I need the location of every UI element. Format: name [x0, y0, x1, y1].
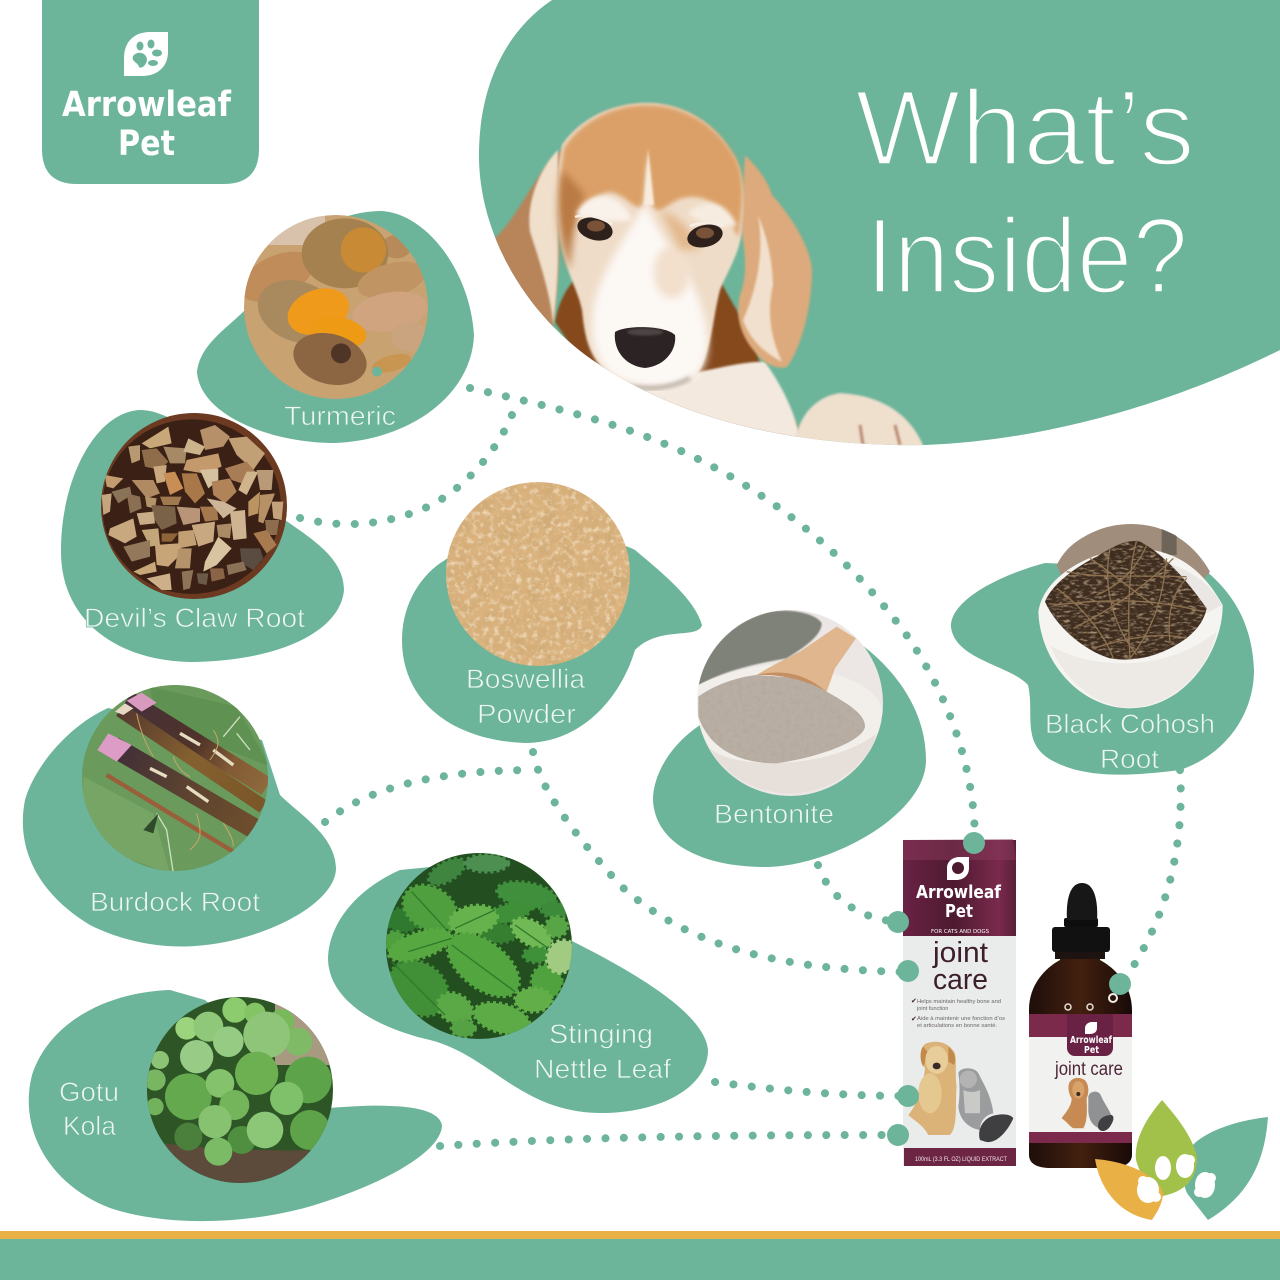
label: Turmeric — [284, 401, 396, 431]
photo: stinging nettle leaves — [386, 853, 572, 1039]
bottle brand text: Arrowleaf — [1070, 1035, 1112, 1046]
bottle brand text — [1070, 1035, 1112, 1056]
connector end dots — [887, 832, 1131, 1146]
label — [466, 664, 586, 729]
box claims: ✔ — [911, 1016, 917, 1023]
box claims: et articulations en bonne santé. — [917, 1023, 997, 1029]
icon: leaf with paw — [124, 32, 168, 76]
nose — [615, 327, 675, 368]
logo wordmark — [62, 85, 232, 164]
logo wordmark: Pet — [118, 124, 175, 164]
decorative three-leaf paw logo — [1095, 1100, 1268, 1220]
box pet photo: dog and cat — [908, 1042, 1013, 1142]
label: Powder — [477, 699, 576, 729]
box brand text: Arrowleaf — [916, 882, 1001, 903]
photo: boswellia powder — [445, 480, 631, 666]
box volume text: 100mL (3.3 FL OZ) LIQUID EXTRACT — [915, 1157, 1007, 1163]
box brand text — [916, 882, 1001, 935]
panel: Burdock Root — [23, 680, 336, 947]
label: Stinging — [549, 1019, 653, 1049]
label — [534, 1019, 672, 1084]
panel: Black Cohosh Root — [951, 523, 1254, 775]
label: Black Cohosh — [1045, 709, 1215, 739]
box brand text: Pet — [945, 901, 973, 922]
photo: black cohosh root in white bowl — [1038, 523, 1223, 708]
box claims — [911, 998, 1005, 1029]
box product name: joint — [932, 937, 988, 969]
logo wordmark: Arrowleaf — [62, 85, 232, 125]
title: What's Inside?: What’s — [855, 67, 1195, 188]
photo: devil's claw pieces in bowl — [100, 412, 290, 602]
product bottle: joint care dropper — [1029, 883, 1132, 1168]
logo badge: Arrowleaf Pet — [42, 0, 259, 184]
box claims: ✔ — [911, 998, 917, 1005]
label: Root — [1100, 744, 1160, 774]
dotted connector lines — [300, 388, 1181, 1146]
title: What's Inside?: Inside? — [866, 195, 1188, 316]
box brand text: FOR CATS AND DOGS — [931, 929, 989, 935]
panel: Stinging Nettle Leaf — [328, 845, 708, 1113]
panel: Devil's Claw Root — [61, 410, 344, 662]
beagle dog photo — [492, 103, 923, 450]
photo: bentonite clay in bowl — [697, 610, 883, 796]
box claims: joint function — [916, 1006, 948, 1012]
icon: box leaf logo — [947, 857, 969, 880]
bottle pet photo — [1062, 1078, 1113, 1131]
photo: gotu kola leaves — [147, 997, 333, 1183]
footer bands — [0, 1231, 1280, 1280]
label — [1045, 709, 1215, 774]
bottle product name: joint care — [1054, 1059, 1123, 1080]
product box: joint care — [903, 839, 1016, 1166]
panel: Bentonite — [653, 600, 926, 867]
photo: burdock roots on leaf — [82, 685, 268, 871]
label: Boswellia — [466, 664, 586, 694]
panel: Turmeric — [197, 205, 474, 443]
eyes — [574, 214, 724, 248]
label: Kola — [63, 1111, 117, 1141]
bottle label badge — [1067, 1014, 1113, 1056]
label: Nettle Leaf — [534, 1054, 672, 1084]
box product name: care — [933, 964, 988, 996]
panel: Gotu Kola — [29, 985, 442, 1221]
box claims: Helps maintain healthy bone and — [917, 999, 1001, 1005]
box claims: Aide à maintenir une fonction d’os — [917, 1016, 1005, 1022]
label: Gotu — [59, 1077, 119, 1107]
label: Devil’s Claw Root — [84, 603, 306, 633]
title: What's Inside? — [855, 67, 1195, 316]
box product name — [932, 937, 988, 996]
panel: Boswellia Powder — [402, 480, 702, 743]
label — [59, 1077, 119, 1141]
photo: turmeric roots — [244, 215, 428, 399]
paw — [795, 393, 923, 450]
bottle brand text: Pet — [1084, 1045, 1099, 1056]
label: Burdock Root — [90, 887, 261, 917]
label: Bentonite — [714, 799, 834, 829]
header shape with title and dog — [479, 0, 1280, 450]
